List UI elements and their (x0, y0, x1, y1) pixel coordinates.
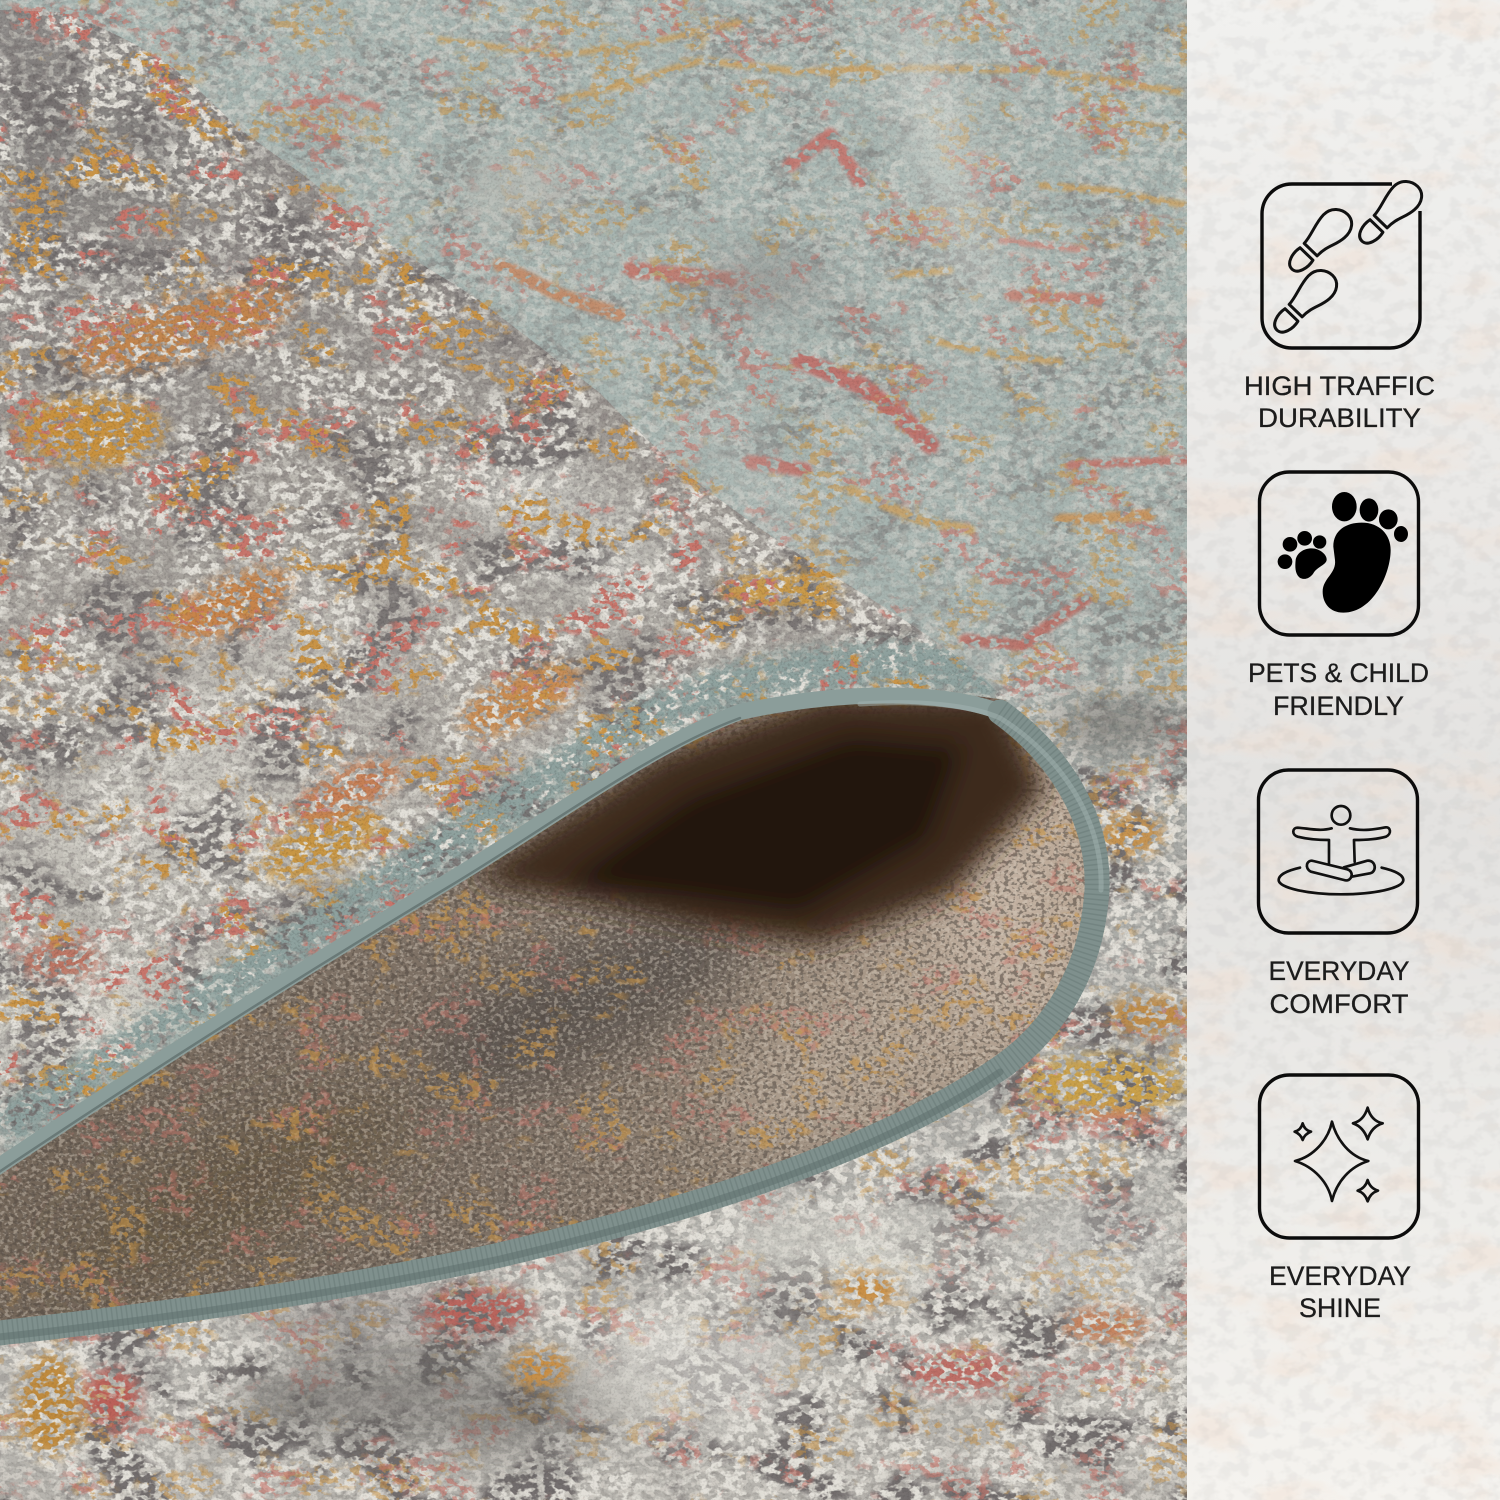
label: everyday shine: SHINE (1299, 1293, 1381, 1323)
feature: everyday shine (1260, 1075, 1418, 1323)
label: pets and child friendly: PETS & CHILD (1248, 658, 1429, 688)
label: everyday shine: EVERYDAY (1269, 1261, 1411, 1291)
icon: footprints (1262, 175, 1428, 348)
rolled rug top surface (0, 0, 1100, 1200)
icon: meditating person (1258, 770, 1418, 933)
label: pets and child friendly: FRIENDLY (1273, 691, 1404, 721)
label: high traffic durability: DURABILITY (1258, 403, 1421, 433)
panel: features sidebar (1187, 0, 1500, 1500)
label: everyday comfort: COMFORT (1270, 989, 1408, 1019)
feature: pets and child friendly (1248, 472, 1429, 721)
icon: sparkles (1260, 1075, 1418, 1238)
photo: rug floor background (0, 0, 1192, 1500)
feature: everyday comfort (1258, 770, 1418, 1019)
rug edge binding (0, 695, 1101, 1338)
rug underside and opening (0, 680, 1120, 1360)
icon: baby foot and paw (1260, 472, 1418, 635)
feature: high traffic durability (1244, 175, 1435, 433)
label: everyday comfort: EVERYDAY (1268, 956, 1410, 986)
label: high traffic durability: HIGH TRAFFIC (1244, 371, 1435, 401)
